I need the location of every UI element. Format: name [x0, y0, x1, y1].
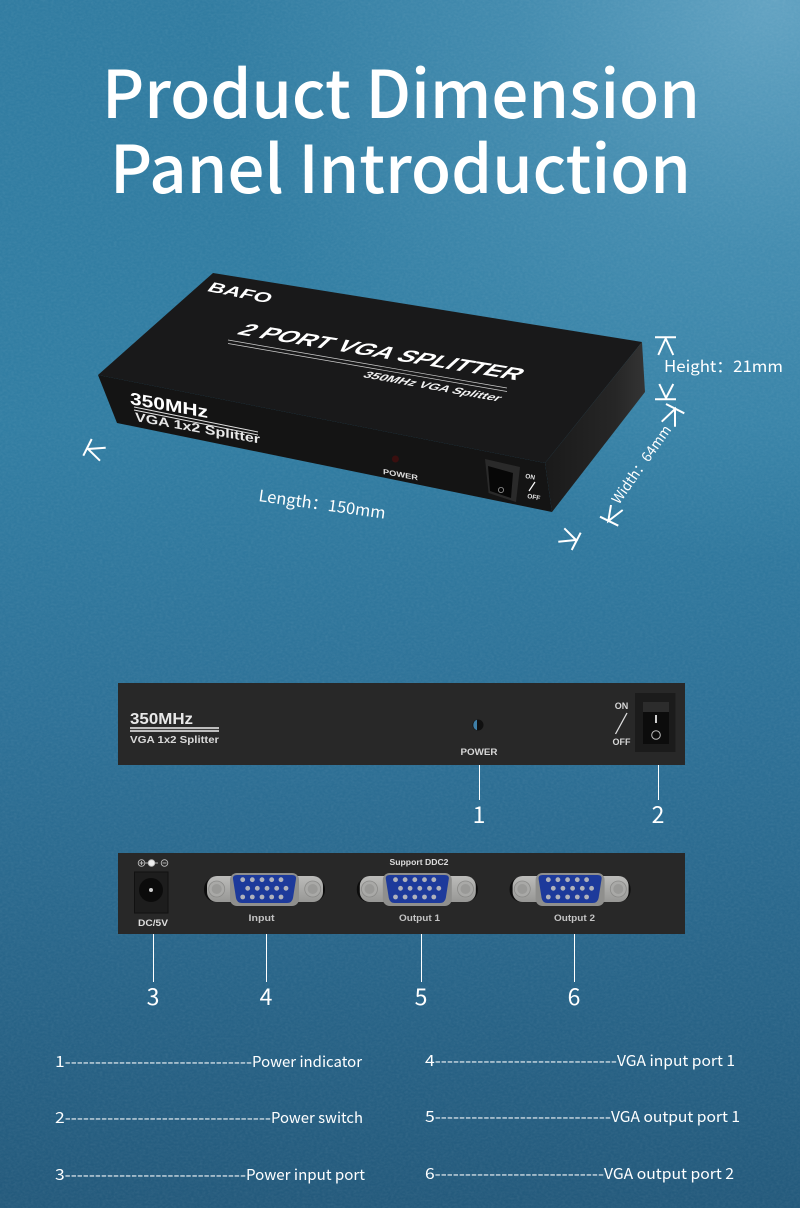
legend 1: Power indicator — [252, 1051, 362, 1072]
legend 5: VGA output port 1 — [611, 1106, 740, 1127]
callout 2: 2 — [652, 796, 664, 830]
dimension: length — [83, 439, 581, 550]
ON OFF label: OFF — [527, 493, 541, 502]
callout 1: 1 — [473, 796, 485, 830]
POWER label: POWER — [460, 747, 498, 758]
legend 2 — [55, 1107, 363, 1128]
legend 3: Power input port — [246, 1164, 365, 1185]
model: VGA 1x2 Splitter — [130, 734, 219, 746]
VGA output 2 connector — [510, 873, 631, 906]
Input label: Input — [248, 913, 275, 924]
front model text: VGA 1x2 Splitter — [135, 410, 260, 446]
dimension: width — [600, 404, 684, 526]
legend 3 — [55, 1164, 365, 1185]
callout 1 — [473, 765, 485, 830]
rocker switch — [485, 459, 520, 502]
legend 6 — [425, 1163, 734, 1184]
title: Product Dimension — [102, 42, 700, 138]
left length arrow — [83, 439, 106, 461]
callout 3: 3 — [147, 978, 159, 1012]
rocker switch — [635, 693, 676, 752]
panel: rear view — [118, 853, 685, 934]
DC jack — [134, 872, 168, 913]
DC label: DC/5V — [138, 918, 169, 929]
front double rule — [134, 407, 258, 435]
legend 6: VGA output port 2 — [604, 1163, 734, 1184]
front face — [98, 375, 552, 512]
brand logo: BAFO — [206, 279, 275, 307]
product photo: splitter in perspective — [98, 273, 645, 512]
callout 5 — [415, 934, 427, 1012]
legend 5: 5----------------------------- — [425, 1106, 611, 1127]
rule — [130, 727, 219, 732]
title: Panel Introduction — [110, 117, 691, 213]
POWER label: POWER — [383, 467, 419, 482]
top double rule — [228, 340, 507, 392]
legend 1 — [55, 1051, 362, 1072]
Support label: Support DDC2 — [390, 857, 449, 867]
ON OFF label: ON — [525, 473, 536, 482]
Output 2 label: Output 2 — [554, 913, 595, 924]
legend 3: 3------------------------------ — [55, 1164, 246, 1185]
legend 1: 1------------------------------- — [55, 1051, 252, 1072]
legend 4: VGA input port 1 — [617, 1050, 735, 1071]
height label: Height：21mm — [664, 353, 783, 377]
callout 4 — [260, 934, 273, 1012]
width arrows — [600, 404, 684, 526]
legend 4 — [425, 1050, 735, 1071]
polarity symbols — [138, 860, 168, 866]
LED — [472, 720, 484, 730]
callout 4: 4 — [260, 978, 273, 1012]
callout 2 — [652, 765, 664, 830]
right length arrow — [558, 528, 581, 550]
350MHz mark: 350MHz — [130, 711, 193, 728]
callout 6: 6 — [568, 978, 580, 1012]
dimension: height — [655, 337, 783, 399]
length label: Length：150mm — [257, 482, 387, 524]
top face — [98, 273, 642, 463]
legend 5 — [425, 1106, 740, 1127]
callout 6 — [568, 934, 580, 1012]
right side face — [545, 342, 645, 512]
callout 3 — [147, 934, 159, 1012]
VGA input connector — [204, 873, 325, 906]
ON / OFF — [612, 701, 631, 747]
legend 2: Power switch — [271, 1107, 363, 1128]
front 350MHz: 350MHz — [130, 388, 208, 422]
power LED — [392, 456, 399, 462]
legend 6: 6---------------------------- — [425, 1163, 604, 1184]
callout 5: 5 — [415, 978, 427, 1012]
legend 4: 4------------------------------ — [425, 1050, 617, 1071]
width label: Width：64mm — [607, 421, 676, 508]
ON / OFF: OFF — [612, 737, 631, 747]
title — [102, 42, 700, 213]
height arrows — [655, 337, 676, 399]
top product name: 2 PORT VGA SPLITTER — [232, 321, 531, 384]
top subtitle: 350MHz VGA Splitter — [360, 369, 506, 403]
ON / OFF: ON — [615, 701, 628, 711]
Output 1 label: Output 1 — [399, 913, 441, 924]
VGA output 1 connector — [357, 873, 478, 906]
legend 2: 2---------------------------------- — [55, 1107, 271, 1128]
panel: front view — [118, 683, 685, 765]
ON OFF label — [525, 473, 541, 502]
